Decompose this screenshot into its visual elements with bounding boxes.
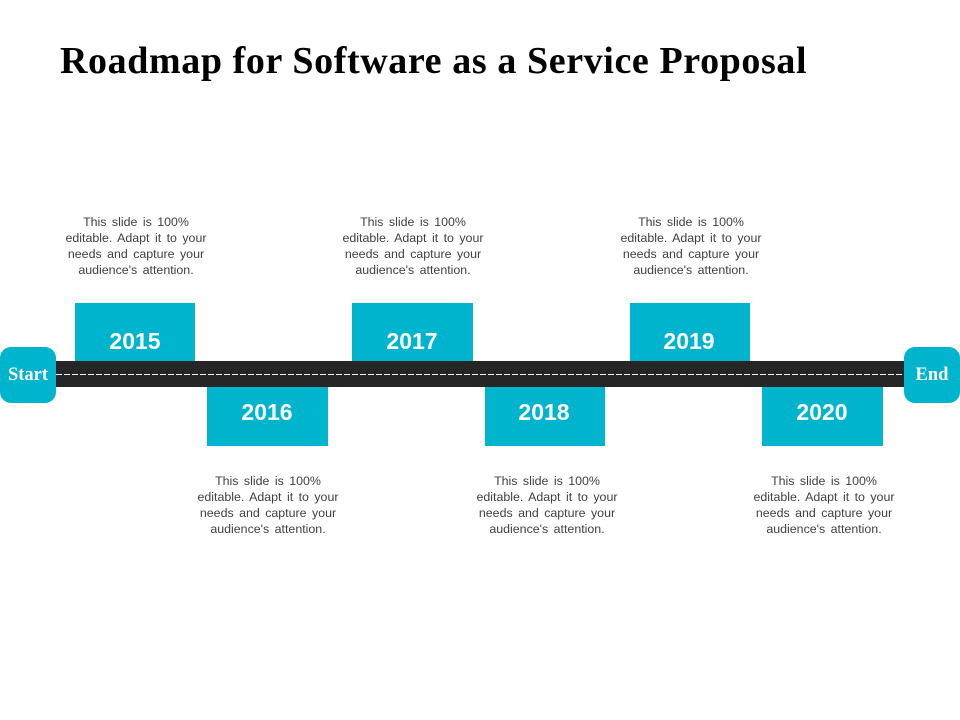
text block: 2019: editable. Adapt it to your	[621, 231, 761, 245]
year box: 2020	[762, 385, 883, 446]
start node	[0, 347, 56, 403]
text block: 2019: This slide is 100%	[638, 215, 744, 229]
text block: 2020: needs and capture your	[756, 506, 892, 520]
year label: 2018: 2018	[518, 399, 570, 425]
text block: 2017: This slide is 100%	[360, 215, 466, 229]
year box: 2015	[75, 303, 195, 363]
text block: 2015: This slide is 100%	[83, 215, 189, 229]
year box: 2016	[207, 385, 328, 446]
text block: 2015: editable. Adapt it to your	[66, 231, 206, 245]
year label: 2020: 2020	[796, 399, 848, 425]
text block: 2015: audience's attention.	[78, 263, 194, 277]
text block: 2016: needs and capture your	[200, 506, 336, 520]
year label: 2017: 2017	[386, 328, 438, 354]
year box: 2017	[352, 303, 473, 363]
text block: 2018: This slide is 100%	[494, 474, 600, 488]
text block: 2017	[343, 215, 484, 277]
text block: 2018: needs and capture your	[479, 506, 615, 520]
title: Roadmap for Software as a Service Proposal	[60, 40, 807, 82]
end node: End	[916, 365, 948, 385]
start node: Start	[8, 365, 48, 385]
text block: 2017: audience's attention.	[355, 263, 471, 277]
text block: 2019	[621, 215, 762, 277]
text block: 2019: audience's attention.	[633, 263, 749, 277]
text block: 2018: audience's attention.	[489, 522, 605, 536]
year box: 2018	[485, 385, 605, 446]
text block: 2015	[66, 215, 206, 277]
text block: 2020: This slide is 100%	[771, 474, 877, 488]
road bar	[50, 361, 910, 387]
text block: 2018: editable. Adapt it to your	[477, 490, 617, 504]
text block: 2017: editable. Adapt it to your	[343, 231, 483, 245]
text block: 2020: audience's attention.	[766, 522, 882, 536]
text block: 2015: needs and capture your	[68, 247, 204, 261]
year label: 2016: 2016	[241, 399, 293, 425]
text block: 2016: editable. Adapt it to your	[198, 490, 338, 504]
text block: 2019: needs and capture your	[623, 247, 759, 261]
text block: 2020: editable. Adapt it to your	[754, 490, 894, 504]
end node	[904, 347, 960, 403]
road dashed centre line	[56, 374, 904, 375]
year label: 2019: 2019	[663, 328, 715, 354]
text block: 2016: audience's attention.	[210, 522, 326, 536]
year label: 2015: 2015	[109, 328, 161, 354]
text block: 2020	[754, 474, 894, 536]
text block: 2016: This slide is 100%	[215, 474, 321, 488]
text block: 2016	[198, 474, 338, 536]
text block: 2018	[477, 474, 618, 536]
year box: 2019	[630, 303, 750, 363]
text block: 2017: needs and capture your	[345, 247, 481, 261]
